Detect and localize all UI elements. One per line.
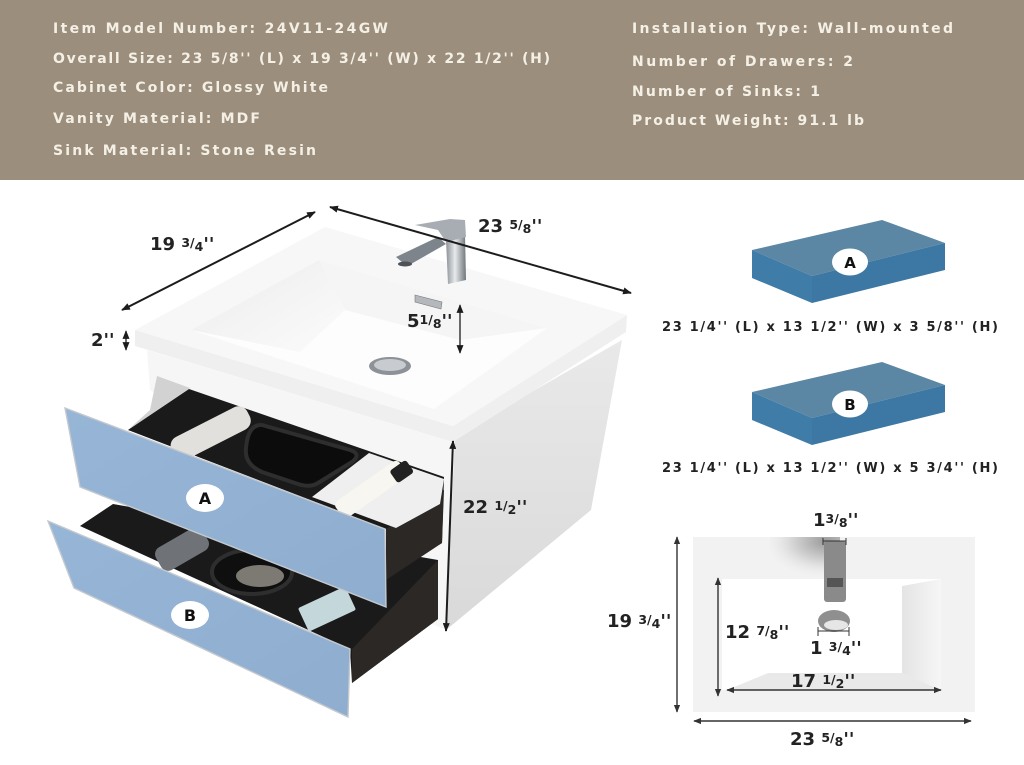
tube in drawer A bbox=[333, 459, 414, 520]
dimension: slab depth 19 3/4 bbox=[607, 537, 677, 712]
spec: vanity material: Vanity Material: MDF bbox=[53, 111, 260, 127]
dimension: width 23 5/8: 23 bbox=[478, 216, 503, 237]
dimension: basin width 17 1/2: / bbox=[831, 672, 836, 687]
spec: overall size: Overall Size: 23 5/8'' (L) x 19 3/4'' (W) x 22 1/2'' (H) bbox=[53, 51, 550, 67]
dimension: basin depth 5 1/8: '' bbox=[442, 311, 453, 332]
dimension: drain 1 3/4: '' bbox=[851, 638, 862, 659]
dimension: depth 19 3/4: 19 bbox=[150, 234, 175, 255]
spec: installation type: Installation Type: Wall-mounted bbox=[632, 21, 953, 37]
dimension: lip 2 bbox=[91, 330, 126, 351]
dimension: height 22 1/2: 1 bbox=[494, 498, 503, 513]
dimension: slab depth 19 3/4: 19 bbox=[607, 611, 632, 632]
dimension: height 22 1/2: 22 bbox=[463, 497, 488, 518]
dimension: basin depth 5 1/8: / bbox=[428, 312, 433, 327]
spec: cabinet color: Cabinet Color: Glossy White bbox=[53, 80, 328, 96]
bottle in drawer A bbox=[167, 403, 254, 464]
dimension: basin depth 12 7/8: 7 bbox=[756, 623, 765, 638]
dimension: slab depth 19 3/4: / bbox=[647, 612, 652, 627]
dimension: basin depth 5 1/8: 8 bbox=[433, 316, 442, 331]
dimension: slab width 23 5/8: / bbox=[830, 730, 835, 745]
drawer diagram A bbox=[752, 220, 945, 303]
dimension: slab width 23 5/8: 5 bbox=[821, 730, 830, 745]
dimension: width 23 5/8 bbox=[330, 207, 631, 293]
drawer diagram B: B bbox=[844, 396, 856, 414]
dimension: basin depth 12 7/8: 12 bbox=[725, 622, 750, 643]
drawer A badge: A bbox=[199, 489, 212, 508]
dimension: height 22 1/2: '' bbox=[516, 497, 527, 518]
dimension: width 23 5/8: 8 bbox=[523, 221, 531, 236]
soap box in drawer B bbox=[298, 586, 356, 632]
drawer B dimensions: 23 1/4'' (L) x 13 1/2'' (W) x 5 3/4'' (H) bbox=[662, 461, 998, 476]
spec: item model number: Item Model Number: 24V11-24GW bbox=[53, 21, 388, 37]
drawer diagram B bbox=[752, 362, 945, 445]
faucet top view bbox=[824, 541, 846, 602]
dimension: basin depth 12 7/8 bbox=[718, 578, 789, 696]
dimension: width 23 5/8: 5 bbox=[509, 217, 518, 232]
sink top view diagram bbox=[607, 510, 975, 750]
dimension: depth 19 3/4: / bbox=[190, 235, 195, 250]
drawer B interior bbox=[80, 504, 438, 683]
dimension: depth 19 3/4: 4 bbox=[195, 239, 204, 254]
drawer B badge bbox=[171, 601, 209, 629]
towel in drawer A bbox=[312, 453, 444, 528]
dimension: height 22 1/2 bbox=[446, 441, 527, 631]
drawer A dimensions: 23 1/4'' (L) x 13 1/2'' (W) x 3 5/8'' (H) bbox=[662, 320, 998, 335]
dimension: faucet 1 3/8: '' bbox=[848, 510, 859, 531]
spec: product weight: Product Weight: 91.1 lb bbox=[632, 113, 864, 129]
dimension: depth 19 3/4 bbox=[122, 212, 315, 310]
dimension: drain 1 3/4: / bbox=[838, 639, 842, 654]
spec: number of sinks: Number of Sinks: 1 bbox=[632, 84, 820, 100]
dimension: basin width 17 1/2: 1 bbox=[822, 672, 831, 687]
faucet bbox=[396, 219, 466, 284]
dimension: drain 1 3/4: 4 bbox=[842, 643, 851, 658]
dimension: slab depth 19 3/4: 4 bbox=[652, 616, 661, 631]
drawer A interior bbox=[128, 389, 444, 580]
faucet shadow bbox=[770, 537, 840, 579]
dimension: width 23 5/8: / bbox=[518, 217, 523, 232]
dimension: basin depth 5 1/8: 1 bbox=[420, 312, 428, 327]
drawer A badge bbox=[186, 484, 224, 512]
dimension: basin depth 12 7/8: / bbox=[765, 623, 770, 638]
drawer opening shadow bbox=[128, 376, 190, 430]
dimension: faucet 1 3/8: 3 bbox=[826, 511, 834, 526]
drawer B front bbox=[48, 521, 350, 717]
dimension: basin width 17 1/2 bbox=[727, 671, 941, 692]
drain top view bbox=[818, 610, 850, 632]
canister in drawer B bbox=[152, 524, 212, 574]
dimension: slab width 23 5/8: '' bbox=[843, 729, 854, 750]
dimension: lip 2: 2'' bbox=[91, 330, 115, 351]
dimension: faucet 1 3/8: / bbox=[834, 511, 839, 526]
dimension: slab width 23 5/8: 23 bbox=[790, 729, 815, 750]
dimension: width 23 5/8: '' bbox=[531, 216, 542, 237]
countertop surface bbox=[135, 227, 627, 426]
dimension: slab width 23 5/8: 8 bbox=[835, 734, 843, 749]
dimension: slab depth 19 3/4: 3 bbox=[638, 612, 647, 627]
dimension: basin width 17 1/2: '' bbox=[844, 671, 855, 692]
dimension: basin width 17 1/2: 17 bbox=[791, 671, 816, 692]
dimension: faucet 1 3/8: 8 bbox=[839, 515, 848, 530]
spec: number of drawers: Number of Drawers: 2 bbox=[632, 54, 853, 70]
tray in drawer A bbox=[246, 425, 357, 486]
dimension: slab depth 19 3/4: '' bbox=[660, 611, 671, 632]
dimension: slab width 23 5/8 bbox=[694, 721, 971, 750]
dimension: drain 1 3/4 bbox=[810, 627, 862, 659]
countertop lip bbox=[135, 315, 627, 442]
vanity cabinet illustration bbox=[48, 219, 627, 717]
dimension: depth 19 3/4: 3 bbox=[181, 235, 190, 250]
dimension: drain 1 3/4: 1 bbox=[810, 638, 823, 659]
header band: specifications bbox=[0, 0, 1024, 180]
drawer A front bbox=[65, 408, 386, 607]
dimension: faucet 1 3/8: 1 bbox=[813, 510, 826, 531]
sink basin bbox=[191, 260, 547, 409]
dimension: height 22 1/2: 2 bbox=[508, 502, 516, 517]
cabinet front panel bbox=[147, 350, 453, 630]
basin bbox=[722, 579, 941, 690]
dimension: faucet 1 3/8 bbox=[813, 510, 859, 545]
drawer diagram A: A bbox=[844, 254, 856, 272]
mirror in drawer B bbox=[212, 550, 292, 594]
dimension: basin depth 12 7/8: '' bbox=[778, 622, 789, 643]
dimension: height 22 1/2: / bbox=[503, 498, 508, 513]
dimension: depth 19 3/4: '' bbox=[203, 234, 214, 255]
spec: sink material: Sink Material: Stone Resin bbox=[53, 143, 316, 159]
cabinet side panel bbox=[446, 340, 622, 630]
dimension: basin depth 5 1/8 bbox=[407, 305, 460, 353]
dimension: drain 1 3/4: 3 bbox=[829, 639, 838, 654]
drawer B badge: B bbox=[184, 606, 196, 625]
dimension: basin depth 12 7/8: 8 bbox=[770, 627, 778, 642]
sink slab bbox=[693, 537, 975, 712]
dimension: basin depth 5 1/8: 5 bbox=[407, 311, 420, 332]
dimension: basin width 17 1/2: 2 bbox=[836, 676, 844, 691]
overflow slot bbox=[415, 295, 442, 309]
drain bbox=[369, 357, 411, 375]
